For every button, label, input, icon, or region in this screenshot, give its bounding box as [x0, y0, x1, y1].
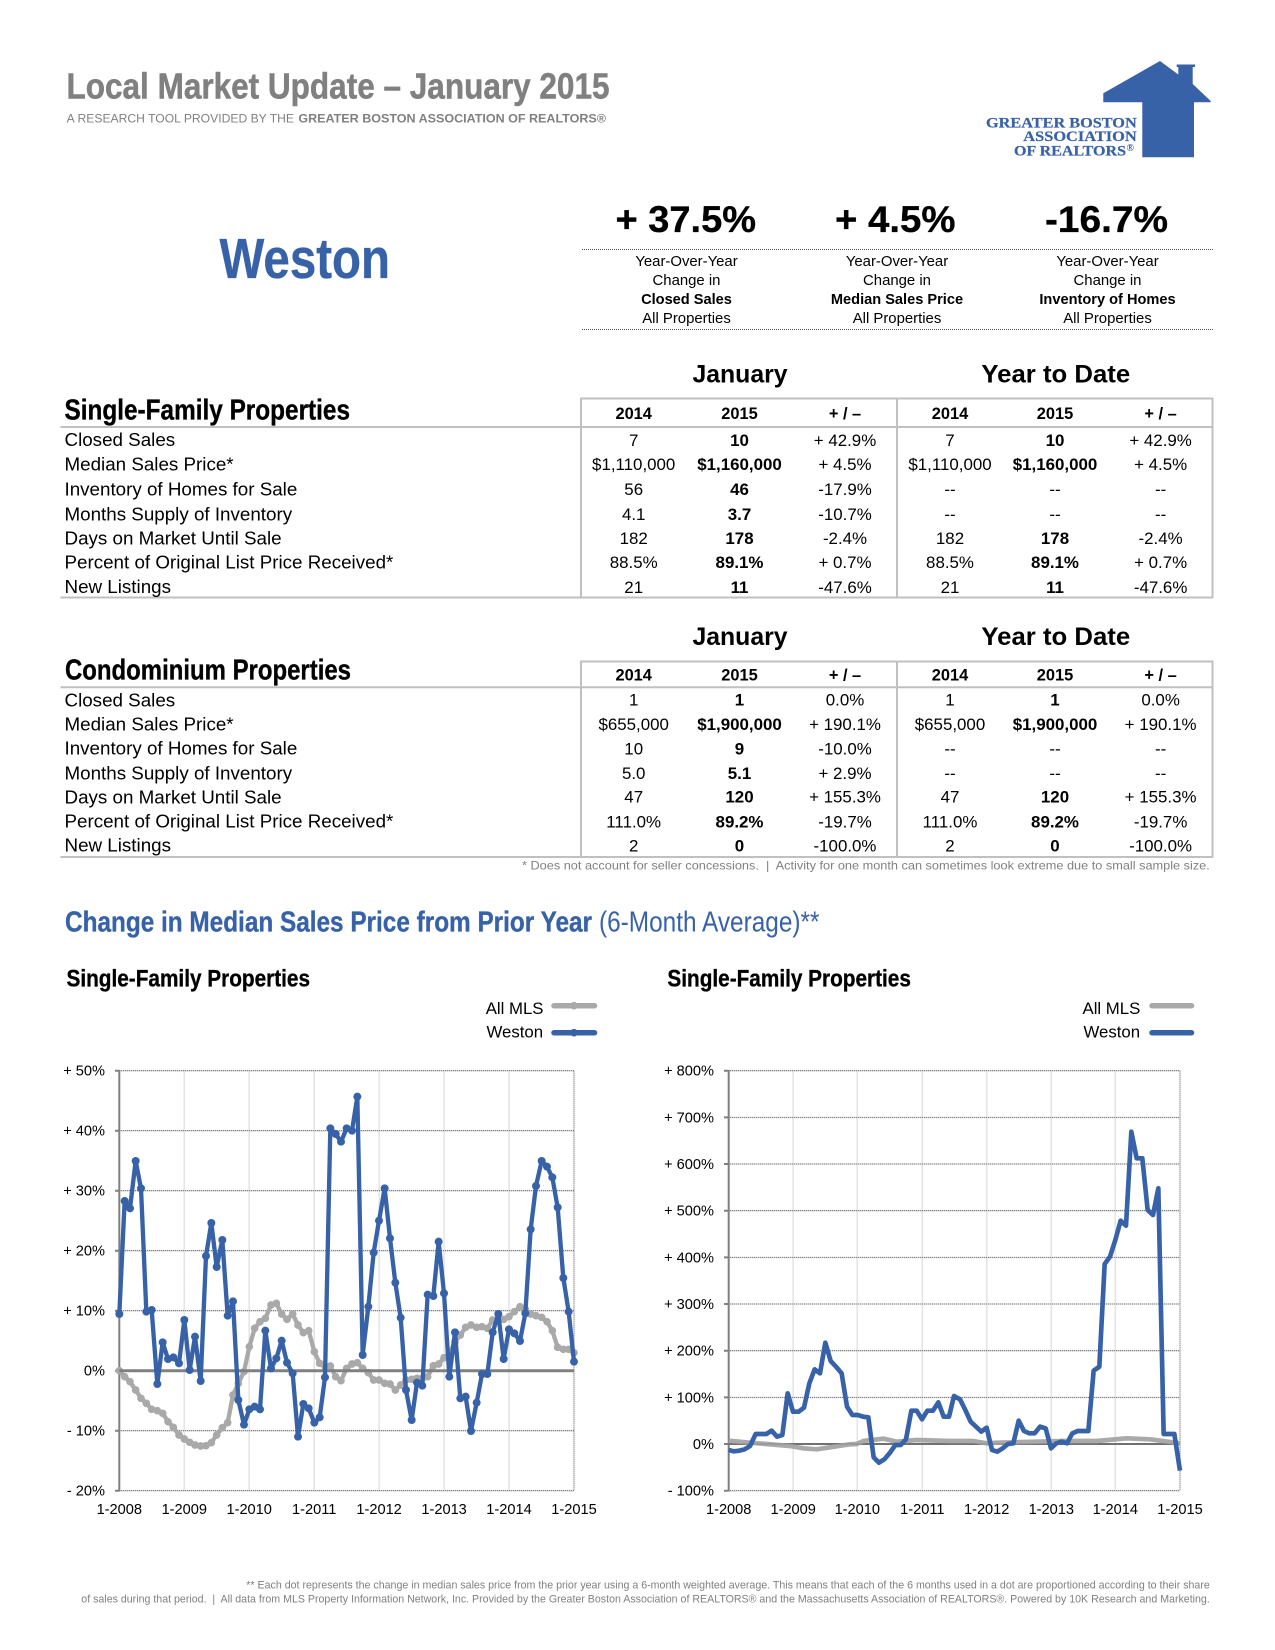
table frame — [60, 398, 1212, 598]
period headings — [692, 624, 1130, 651]
panel: right chart — [664, 966, 1203, 1518]
row: days on market: 182 — [936, 529, 964, 548]
row: median sales price: Median Sales Price* — [64, 714, 234, 735]
row: percent of list price: 111.0% — [606, 812, 661, 831]
chart heading: Single-Family Properties — [66, 966, 310, 993]
legend — [1082, 999, 1192, 1042]
table frame — [60, 662, 1212, 857]
row: months supply: -- — [944, 505, 956, 524]
row: closed sales: 10 — [1046, 431, 1064, 450]
row: days on market: + 155.3% — [809, 788, 881, 807]
column headers: 2015 — [721, 405, 758, 423]
row: closed sales: 1 — [1050, 691, 1060, 710]
row: days on market: 178 — [725, 529, 754, 548]
x axis labels: 1-2011 — [900, 1502, 944, 1518]
heading: Single-Family Properties — [64, 394, 350, 426]
logo text — [986, 115, 1137, 159]
y axis labels: + 200% — [664, 1344, 714, 1360]
row: percent of list price — [64, 552, 1187, 572]
column headers: 2014 — [615, 405, 653, 423]
row: percent of list price: 89.2% — [1031, 812, 1079, 831]
period headings: Year to Date — [981, 624, 1130, 651]
zero line — [729, 1443, 1180, 1445]
row: new listings: -100.0% — [814, 836, 876, 855]
stat: closed sales — [616, 198, 756, 327]
row: median sales price: $1,900,000 — [697, 715, 782, 734]
row: new listings: 2 — [629, 836, 638, 855]
footer note: of sales during that period. | All data from MLS Property Information Network, Inc. Provided by the Greater Boston Association of REALTORS® and the Massachusetts Association of REALTORS®. Powered by 10K Research and Marketing. — [81, 1594, 1210, 1606]
row: inventory: Inventory of Homes for Sale — [64, 478, 297, 500]
x axis labels: 1-2015 — [1157, 1502, 1203, 1518]
header: title block — [66, 66, 610, 126]
row: closed sales: Closed Sales — [64, 689, 175, 710]
row: months supply: -- — [1049, 764, 1061, 783]
stat: inventory of homes: Inventory of Homes — [1039, 292, 1176, 308]
legend: All MLS — [1082, 999, 1140, 1018]
column headers: 2015 — [1037, 405, 1073, 423]
row: months supply: -- — [1155, 764, 1166, 783]
row: median sales price: Median Sales Price* — [64, 454, 234, 474]
row: new listings: -100.0% — [1129, 836, 1192, 855]
row: median sales price: $1,110,000 — [908, 455, 992, 474]
stat: median sales price: + 4.5% — [835, 198, 956, 240]
row: percent of list price: 89.2% — [716, 812, 763, 831]
row: median sales price: $655,000 — [915, 715, 985, 734]
axes — [115, 1070, 119, 1492]
legend: Weston — [486, 1023, 543, 1042]
series: Weston — [119, 1097, 574, 1437]
row: new listings — [64, 576, 1187, 597]
footer note: ** Each dot represents the change in median sales price from the prior year using a 6-month weighted average. This means that each of the 6 months used in a dot are proportioned according to their share — [246, 1579, 1210, 1591]
y axis labels: + 300% — [664, 1297, 714, 1313]
row: median sales price: $1,110,000 — [592, 455, 675, 474]
x axis labels: 1-2012 — [964, 1502, 1009, 1518]
row: days on market: 47 — [624, 788, 643, 807]
row: inventory: -- — [1155, 480, 1166, 499]
stat: median sales price: Year-Over-Year — [846, 254, 948, 270]
row: months supply: Months Supply of Inventory — [64, 504, 293, 524]
x axis labels: 1-2012 — [356, 1502, 402, 1518]
column headers: 2015 — [721, 667, 758, 685]
row: median sales price: + 4.5% — [1134, 455, 1187, 474]
stat: median sales price: Median Sales Price — [831, 292, 963, 308]
column headers: + / – — [829, 667, 861, 685]
y axis labels: + 40% — [63, 1124, 105, 1140]
icon: house — [1103, 61, 1211, 157]
row: closed sales: + 42.9% — [1129, 431, 1192, 450]
row: new listings — [64, 835, 1192, 856]
y axis labels — [63, 1064, 105, 1500]
zero line — [119, 1369, 574, 1372]
y axis labels: + 30% — [63, 1184, 105, 1200]
town name: Weston — [220, 227, 390, 291]
row: inventory: -- — [944, 739, 956, 758]
stat: inventory of homes: Year-Over-Year — [1056, 254, 1159, 270]
y axis labels: - 20% — [67, 1484, 105, 1500]
row: months supply: 3.7 — [728, 505, 751, 524]
line chart: All MLS vs Weston, +800% to -100% — [664, 1064, 1203, 1518]
row: inventory: -10.0% — [818, 739, 872, 758]
x axis labels: 1-2015 — [551, 1502, 597, 1518]
row: percent of list price: 111.0% — [923, 812, 977, 831]
x axis labels: 1-2009 — [162, 1502, 207, 1518]
row: percent of list price: + 0.7% — [818, 553, 872, 572]
y axis labels: + 700% — [664, 1110, 714, 1126]
row: months supply — [64, 763, 1166, 784]
row: months supply: + 2.9% — [818, 764, 872, 783]
row: closed sales: 0.0% — [1141, 691, 1180, 710]
row: months supply: -- — [1049, 505, 1061, 524]
column headers: 2015 — [1037, 667, 1073, 685]
panel: single-family table — [60, 362, 1212, 598]
stat: median sales price: All Properties — [853, 311, 941, 327]
row: inventory: -- — [1049, 480, 1061, 499]
stat: closed sales: All Properties — [642, 311, 731, 327]
x axis labels: 1-2013 — [421, 1502, 467, 1518]
row: inventory: 46 — [730, 480, 749, 499]
logo text: ® — [1126, 143, 1134, 154]
row: new listings: -47.6% — [818, 578, 872, 597]
row: new listings: 11 — [731, 578, 748, 597]
y axis labels: + 100% — [664, 1390, 714, 1406]
stat: median sales price — [831, 198, 963, 327]
stat: median sales price: Change in — [863, 273, 931, 289]
y axis labels: + 50% — [63, 1064, 105, 1080]
row: months supply: -- — [944, 764, 956, 783]
row: percent of list price: 89.1% — [1031, 553, 1079, 572]
row: closed sales: 1 — [629, 691, 638, 710]
row: percent of list price: -19.7% — [818, 812, 872, 831]
chart heading: Single-Family Properties — [667, 966, 911, 993]
row: percent of list price: 88.5% — [926, 553, 974, 572]
series: All MLS — [119, 1303, 574, 1446]
row: new listings: 21 — [941, 578, 959, 597]
heading: Condominium Properties — [65, 654, 351, 686]
row: median sales price: + 190.1% — [809, 715, 881, 734]
period headings — [692, 362, 1130, 389]
column headers: 2014 — [932, 667, 969, 685]
subtitle — [67, 112, 606, 126]
row: percent of list price: Percent of Original List Price Received* — [64, 552, 394, 572]
row: new listings: New Listings — [64, 576, 171, 597]
row: new listings: 0 — [1050, 836, 1060, 855]
column headers — [615, 405, 1177, 423]
row: new listings: 0 — [735, 836, 744, 855]
x axis labels: 1-2009 — [770, 1502, 816, 1518]
section heading: Change in Median Sales Price from Prior Year — [65, 907, 592, 939]
row: median sales price — [64, 714, 1197, 735]
row: percent of list price — [64, 810, 1187, 831]
row: percent of list price: Percent of Original List Price Received* — [64, 810, 394, 831]
logo text: OF REALTORS — [1014, 143, 1126, 159]
row: percent of list price: -19.7% — [1134, 812, 1187, 831]
row: days on market: + 155.3% — [1125, 788, 1197, 807]
x axis labels — [706, 1502, 1203, 1518]
row: closed sales: 1 — [945, 691, 955, 710]
series: Weston — [729, 1132, 1180, 1471]
row: median sales price: $1,900,000 — [1013, 715, 1097, 734]
row: new listings: 11 — [1046, 578, 1064, 597]
y axis labels: + 500% — [664, 1204, 714, 1220]
column headers: 2014 — [932, 405, 969, 423]
row: days on market: 47 — [941, 788, 959, 807]
row: inventory: -- — [944, 480, 956, 499]
x axis labels: 1-2010 — [226, 1502, 272, 1518]
column headers: + / – — [829, 405, 861, 423]
row: days on market: 120 — [725, 788, 754, 807]
panel: left chart — [63, 966, 597, 1518]
row: median sales price: + 190.1% — [1125, 715, 1197, 734]
subtitle: A RESEARCH TOOL PROVIDED BY THE — [67, 112, 294, 126]
column headers: + / – — [1144, 405, 1177, 423]
logo: Greater Boston Association of Realtors — [986, 61, 1211, 159]
row: months supply: 5.1 — [728, 764, 751, 783]
y axis labels: + 10% — [63, 1304, 105, 1320]
row: new listings: 2 — [945, 836, 955, 855]
subtitle: GREATER BOSTON ASSOCIATION OF REALTORS® — [298, 112, 606, 126]
row: median sales price: $1,160,000 — [697, 455, 782, 474]
row: median sales price: $655,000 — [598, 715, 669, 734]
x axis labels: 1-2008 — [97, 1502, 142, 1518]
row: days on market — [64, 528, 1183, 548]
row: months supply: Months Supply of Inventory — [64, 763, 293, 784]
section heading: (6-Month Average)** — [599, 907, 820, 939]
y axis labels: + 600% — [664, 1157, 714, 1173]
row: inventory: Inventory of Homes for Sale — [64, 738, 297, 759]
row: days on market: 120 — [1041, 788, 1069, 807]
row: inventory: -17.9% — [818, 480, 872, 499]
row: inventory — [64, 738, 1166, 759]
row: new listings: -47.6% — [1134, 578, 1187, 597]
row: months supply: -10.7% — [818, 505, 872, 524]
row: percent of list price: + 0.7% — [1134, 553, 1187, 572]
y axis labels: + 800% — [664, 1064, 714, 1080]
row: closed sales: 7 — [629, 431, 638, 450]
y axis labels: 0% — [693, 1437, 714, 1453]
row: days on market: -2.4% — [823, 529, 867, 548]
table footnote: * Does not account for seller concessions. | Activity for one month can sometimes look extreme due to small sample size. — [522, 858, 1210, 872]
logo text: ASSOCIATION — [1023, 129, 1137, 145]
x axis labels — [97, 1502, 597, 1518]
y axis labels: + 400% — [664, 1250, 714, 1266]
panel: year-over-year stats — [582, 198, 1213, 330]
period headings: January — [692, 362, 788, 389]
row: percent of list price: 89.1% — [716, 553, 763, 572]
y axis labels — [664, 1064, 714, 1500]
y axis labels: - 10% — [67, 1424, 105, 1440]
row: percent of list price: 88.5% — [610, 553, 658, 572]
panel: condominium table — [60, 624, 1212, 857]
stat: inventory of homes: -16.7% — [1045, 198, 1168, 240]
row: closed sales: 10 — [730, 431, 749, 450]
stat: closed sales: Year-Over-Year — [635, 254, 738, 270]
series: All MLS — [729, 1438, 1180, 1449]
x axis labels: 1-2011 — [292, 1502, 336, 1518]
period headings: January — [692, 624, 788, 651]
axes — [724, 1070, 729, 1492]
row: inventory: -- — [1049, 739, 1061, 758]
x axis labels: 1-2014 — [486, 1502, 532, 1518]
stat: inventory of homes: Change in — [1074, 273, 1141, 289]
row: days on market: 182 — [620, 529, 648, 548]
row: months supply: -- — [1155, 505, 1166, 524]
row: closed sales: 0.0% — [826, 691, 864, 710]
row: closed sales: 1 — [735, 691, 744, 710]
column headers: 2014 — [615, 667, 653, 685]
row: median sales price — [64, 454, 1187, 474]
x axis labels: 1-2008 — [706, 1502, 751, 1518]
row: closed sales — [64, 429, 1192, 450]
row: inventory: 56 — [624, 480, 643, 499]
row: closed sales: Closed Sales — [64, 429, 175, 450]
y axis labels: 0% — [84, 1364, 105, 1380]
row: closed sales — [64, 689, 1180, 710]
stat: closed sales: + 37.5% — [616, 198, 756, 240]
column headers: + / – — [1144, 667, 1177, 685]
row: days on market — [64, 786, 1197, 807]
row: closed sales: + 42.9% — [814, 431, 876, 450]
row: new listings: New Listings — [64, 835, 171, 856]
legend — [486, 999, 594, 1042]
logo text: GREATER BOSTON — [986, 115, 1137, 131]
row: days on market: -2.4% — [1139, 529, 1183, 548]
row: inventory: 9 — [735, 739, 744, 758]
y axis labels: + 20% — [63, 1244, 105, 1260]
row: new listings: 21 — [624, 578, 643, 597]
row: median sales price: + 4.5% — [818, 455, 872, 474]
row: months supply: 4.1 — [622, 505, 645, 524]
x axis labels: 1-2010 — [835, 1502, 880, 1518]
row: days on market: Days on Market Until Sale — [64, 786, 282, 807]
legend: All MLS — [486, 999, 544, 1018]
column headers — [615, 667, 1177, 685]
row: median sales price: $1,160,000 — [1013, 455, 1097, 474]
row: inventory: 10 — [624, 739, 643, 758]
period headings: Year to Date — [981, 362, 1130, 389]
footer note — [81, 1579, 1210, 1606]
row: closed sales: 7 — [945, 431, 955, 450]
x axis labels: 1-2013 — [1029, 1502, 1074, 1518]
stat: inventory of homes — [1039, 198, 1176, 327]
stat: closed sales: Change in — [653, 273, 720, 289]
stat: inventory of homes: All Properties — [1063, 311, 1152, 327]
row: months supply: 5.0 — [622, 764, 645, 783]
y axis labels: - 100% — [668, 1484, 714, 1500]
row: inventory: -- — [1155, 739, 1166, 758]
legend: Weston — [1084, 1023, 1140, 1042]
title: Local Market Update – January 2015 — [66, 66, 610, 106]
row: inventory — [64, 478, 1166, 500]
x axis labels: 1-2014 — [1093, 1502, 1138, 1518]
row: days on market: 178 — [1041, 529, 1069, 548]
row: days on market: Days on Market Until Sale — [64, 528, 282, 548]
stat: closed sales: Closed Sales — [641, 292, 732, 308]
line chart: All MLS vs Weston, +50% to -20% — [63, 1064, 597, 1518]
row: months supply — [64, 504, 1166, 524]
